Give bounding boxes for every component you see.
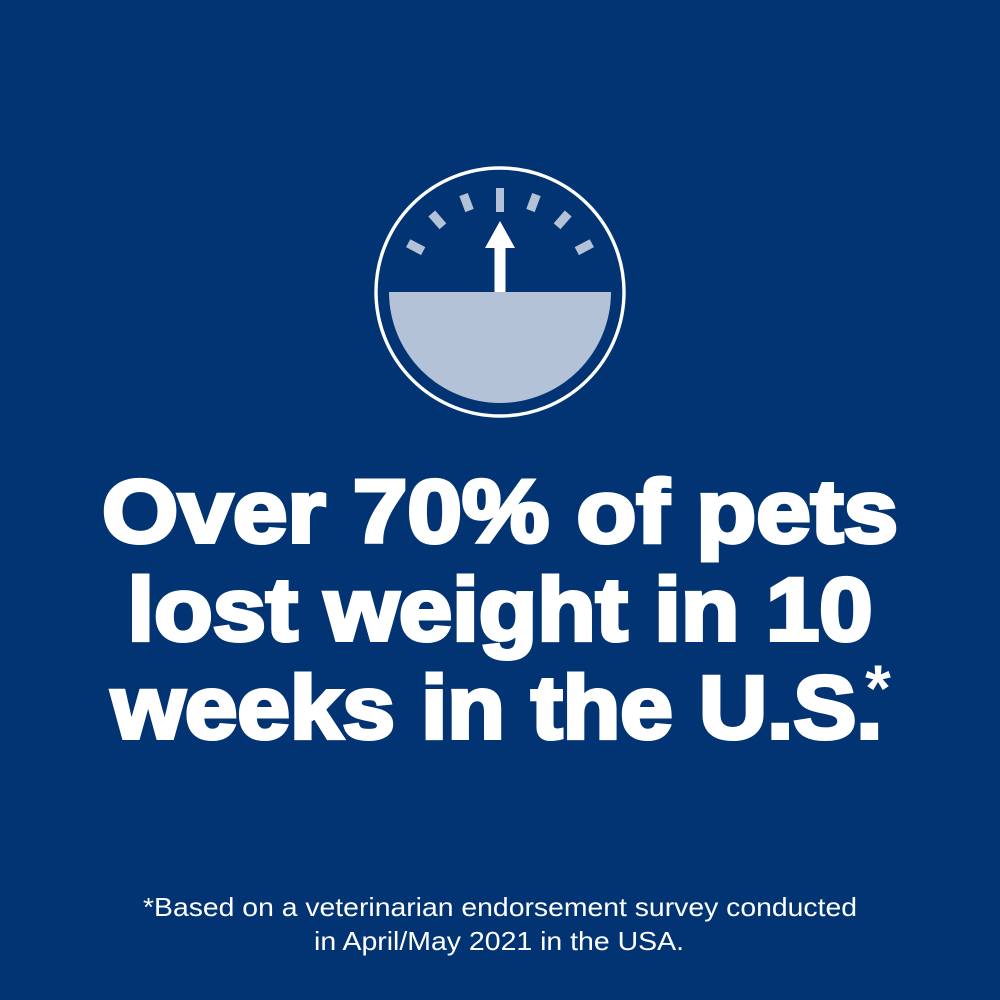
headline: lost weight in 10 xyxy=(128,559,872,659)
icon: weight scale gauge xyxy=(376,168,624,416)
headline: weeks in the U.S. xyxy=(110,657,882,757)
gauge arrow needle xyxy=(485,221,515,292)
headline xyxy=(102,461,898,757)
headline: Over 70% of pets xyxy=(102,461,898,561)
gauge tick marks xyxy=(406,188,594,255)
footnote: *Based on a veterinarian endorsement survey conducted xyxy=(143,892,857,922)
gauge outer ring xyxy=(376,168,624,416)
footnote xyxy=(143,892,857,956)
gauge lower half fill xyxy=(389,292,611,403)
footnote: in April/May 2021 in the USA. xyxy=(314,926,684,956)
headline asterisk: * xyxy=(865,651,891,725)
